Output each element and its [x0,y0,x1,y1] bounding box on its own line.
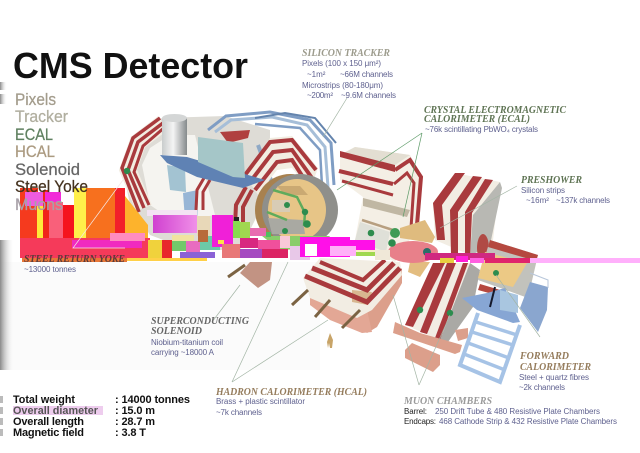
title: CMS Detector [13,45,248,86]
label: muon chambers: Endcaps: [404,417,436,426]
label: superconducting solenoid: carrying ~18000 A [151,348,215,357]
inner wheel arcs [196,178,252,228]
label: superconducting solenoid [151,316,249,357]
salmon support feet [393,322,468,372]
label: silicon tracker [302,48,396,100]
label: preshower: ~137k channels [556,196,610,205]
leader lines [73,98,540,385]
legend: Steel Yoke [15,178,88,196]
detector illustration [122,112,548,382]
legend [15,91,88,214]
rear lower feet [228,262,272,288]
statistics: Magnetic field [13,427,84,439]
label: superconducting solenoid: SUPERCONDUCTING [151,316,249,327]
label: muon chambers [403,396,617,426]
statistics: Overall length [13,416,84,428]
legend: Solenoid [15,161,80,179]
label: silicon tracker: ~1m² [307,70,326,79]
blue platform [160,155,265,188]
preshower endcap [433,173,502,262]
legend: Muons [15,196,63,214]
legend: HCAL [15,143,55,161]
label: hadron calorimeter: HADRON CALORIMETER (HCAL) [215,387,367,398]
statistics: : 14000 tonnes [115,394,190,406]
label: preshower: PRESHOWER [521,175,582,186]
label: muon chambers: 468 Cathode Strip & 432 Resistive Plate Chambers [439,417,617,426]
label: muon chambers: MUON CHAMBERS [403,396,492,407]
label: silicon tracker: ~9.6M channels [341,91,396,100]
tracker and ECAL barrel [255,174,338,250]
label: muon chambers: Barrel: [404,407,427,416]
barrel yoke chevrons [245,136,318,195]
human scale figure [327,333,333,348]
label: steel return yoke [24,254,125,274]
label: muon chambers: 250 Drift Tube & 480 Resistive Plate Chambers [435,407,600,416]
legend: Pixels [15,91,56,109]
central HCAL and ECAL segment [339,147,422,262]
label: crystal ECAL: CRYSTAL ELECTROMAGNETIC [424,105,567,116]
legend: ECAL [15,126,53,144]
statistics: : 3.8 T [115,427,146,439]
label: forward calorimeter: FORWARD [519,351,569,362]
beam pipe section [388,220,438,277]
cold box cylinder [162,114,187,155]
label: forward calorimeter: Steel + quartz fibres [519,373,589,382]
statistics: : 28.7 m [115,416,155,428]
label: crystal ECAL: CALORIMETER (ECAL) [424,114,530,125]
label: silicon tracker: Pixels (100 x 150 μm²) [302,59,381,68]
forward calorimeter and table [460,240,548,382]
statistics: : 15.0 m [115,405,155,417]
rear yoke wheel [122,116,270,250]
label: silicon tracker: ~200m² [307,91,333,100]
label: steel return yoke: ~13000 tonnes [24,265,76,274]
blue service pipes [208,112,336,187]
statistics: Overall diameter [13,405,99,417]
statistics: Total weight [13,394,75,406]
legend: Tracker [15,108,68,126]
label: silicon tracker: Microstrips (80-180μm) [302,81,383,90]
label: silicon tracker: ~66M channels [340,70,393,79]
label: crystal ECAL [424,105,567,134]
label: hadron calorimeter: ~7k channels [216,408,262,417]
label: forward calorimeter: CALORIMETER [520,362,591,373]
label: steel return yoke: STEEL RETURN YOKE [24,254,125,265]
electronics box [198,137,245,178]
label: superconducting solenoid: Niobium-titanium coil [151,338,223,347]
statistics [13,394,190,439]
label: crystal ECAL: ~76k scintillating PbWO₄ crystals [425,125,538,134]
label: hadron calorimeter: Brass + plastic scintillator [216,397,305,406]
label: preshower [521,175,610,205]
lower middle yoke wheel [292,258,402,333]
label: silicon tracker: SILICON TRACKER [302,48,390,59]
label: forward calorimeter: ~2k channels [519,383,565,392]
label: hadron calorimeter [215,387,367,417]
support columns [167,165,198,233]
label: superconducting solenoid: SOLENOID [151,326,202,337]
glitch band [20,188,640,263]
label: preshower: Silicon strips [521,186,565,195]
lower barrel wheel [405,263,480,342]
label: forward calorimeter [519,351,591,392]
label: preshower: ~16m² [526,196,549,205]
